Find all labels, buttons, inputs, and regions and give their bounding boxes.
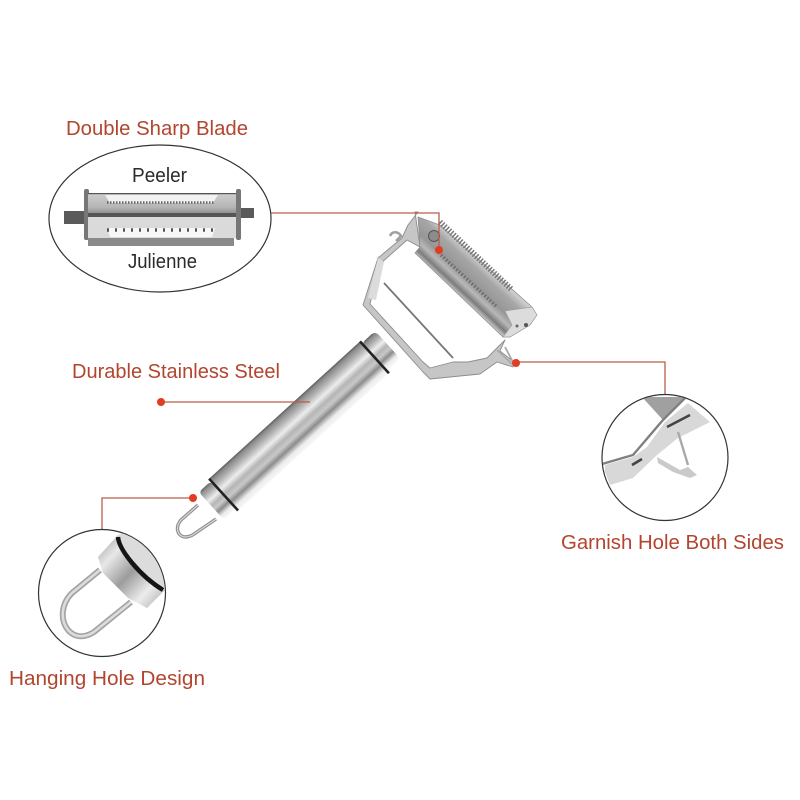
icon: double blade: [64, 189, 254, 246]
panel: hanging hole detail: [38, 530, 175, 656]
label: Peeler: Peeler: [132, 165, 187, 187]
peeler handle: [197, 329, 402, 522]
label: Julienne: Julienne: [128, 251, 197, 273]
callout line: hanging: [102, 498, 193, 530]
heading: Hanging Hole Design: Hanging Hole Design: [9, 668, 205, 690]
heading: Double Sharp Blade: Double Sharp Blade: [66, 118, 248, 140]
callout dot: garnish: [512, 359, 520, 367]
head frame: [363, 212, 514, 379]
callout line: garnish: [516, 362, 665, 394]
callout dot: steel: [157, 398, 165, 406]
heading: Durable Stainless Steel: Durable Stainless Steel: [72, 361, 280, 383]
callout line: steel: [161, 401, 310, 403]
garnish hole: [497, 347, 513, 364]
callout dot: hanging: [189, 494, 197, 502]
blade body: [415, 217, 537, 337]
callout dot: blade: [435, 246, 443, 254]
peeler head: [363, 212, 537, 379]
panel: blade detail ellipse: [49, 145, 271, 292]
icon: hanging loop: [178, 505, 216, 537]
heading: Garnish Hole Both Sides: Garnish Hole Both Sides: [561, 532, 784, 554]
panel: garnish hole detail: [602, 394, 728, 520]
callout line: blade: [271, 213, 439, 250]
